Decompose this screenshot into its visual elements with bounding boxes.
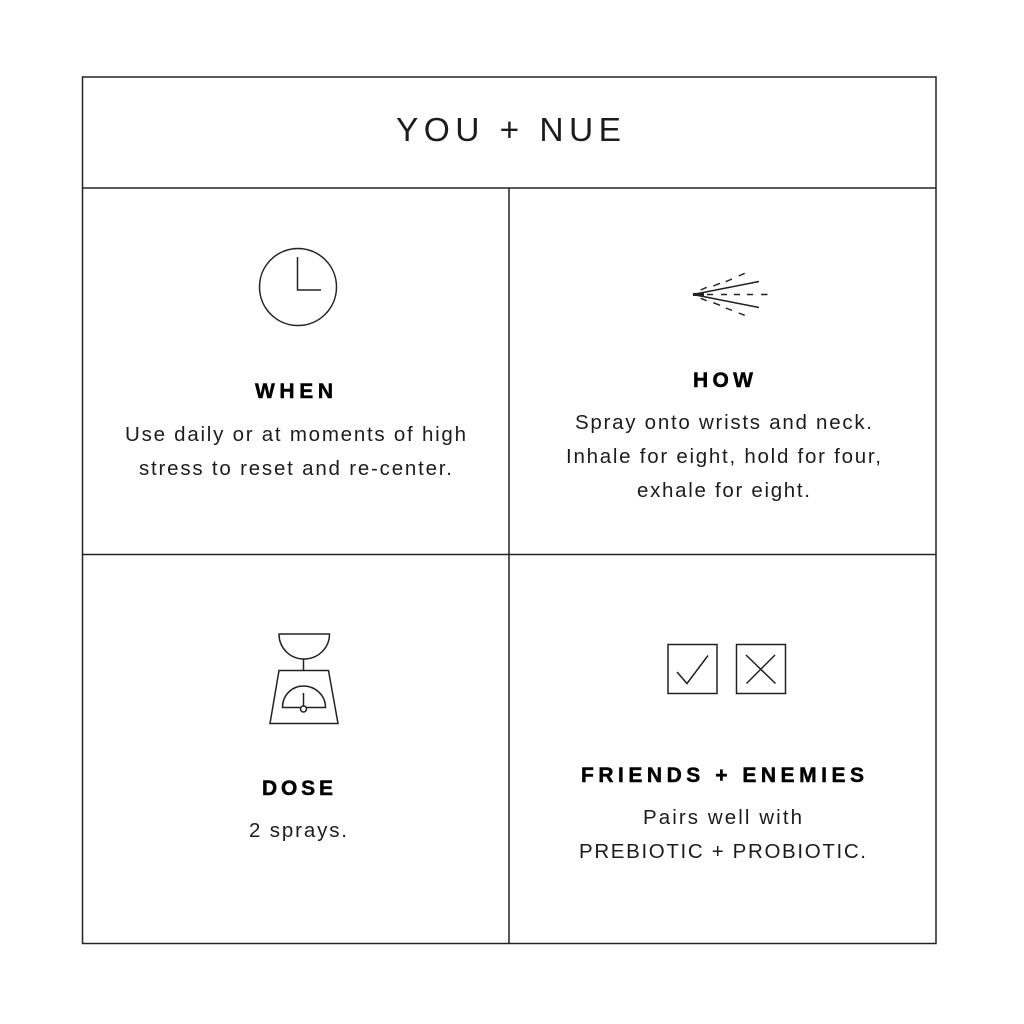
heading: when: WHEN — [255, 380, 333, 403]
heading: dose: DOSE — [262, 777, 333, 800]
icon: clock — [260, 248, 336, 326]
text: friends + enemies — [579, 806, 866, 863]
icon: spray — [693, 273, 768, 315]
text: how: exhale for eight. — [637, 479, 810, 502]
heading: how: HOW — [693, 369, 753, 392]
icon: scale — [270, 634, 338, 724]
panel: dose — [249, 634, 347, 842]
text: how: Spray onto wrists and neck. — [575, 411, 872, 434]
text: when — [125, 423, 466, 480]
panel: how — [566, 273, 881, 502]
outer frame and grid — [82, 77, 936, 944]
text: how: Inhale for eight, hold for four, — [566, 445, 881, 468]
text: dose: 2 sprays. — [249, 819, 347, 842]
heading: friends + enemies: FRIENDS + ENEMIES — [581, 764, 864, 787]
icon: cross box — [736, 644, 786, 694]
panel: friends + enemies — [579, 644, 866, 863]
text: when: stress to reset and re-center. — [139, 457, 452, 480]
text: how — [566, 411, 881, 502]
title: YOU + NUE — [396, 112, 621, 149]
icon: check box — [668, 644, 717, 694]
panel: when — [125, 248, 466, 480]
text: when: Use daily or at moments of high — [125, 423, 466, 446]
text: friends + enemies: Pairs well with — [643, 806, 802, 829]
text: friends + enemies: PREBIOTIC + PROBIOTIC. — [579, 840, 866, 863]
